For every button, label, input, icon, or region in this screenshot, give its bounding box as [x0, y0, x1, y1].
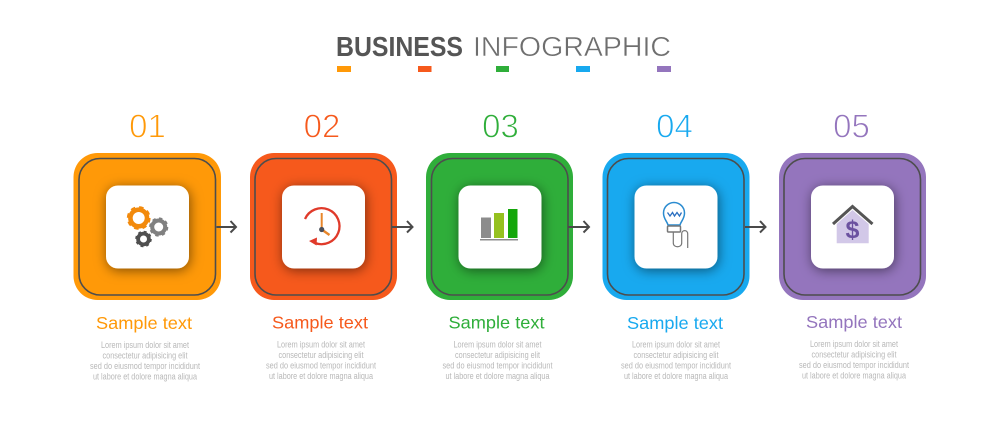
panel: step 5: [779, 108, 926, 382]
step 3 body text: sed do eiusmod tempor incididunt: [442, 360, 553, 372]
panel: step 3: [426, 108, 573, 382]
title: INFOGRAPHIC: [473, 31, 671, 62]
step 3 body text: consectetur adipisicing elit: [455, 350, 540, 361]
card 1 icon tile: [106, 186, 189, 268]
step 1 body text: consectetur adipisicing elit: [102, 350, 188, 362]
step 2 body text: sed do eiusmod tempor incididunt: [266, 360, 376, 372]
step 5 body text: consectetur adipisicing elit: [812, 350, 897, 360]
arrow 2 to 3: [392, 221, 412, 232]
number 05: 05: [833, 108, 870, 144]
step 3 body text: ut labore et dolore magna aliqua: [446, 371, 550, 382]
step 1 body text: Lorem ipsum dolor sit amet: [101, 340, 189, 351]
card 2 frame: [255, 158, 392, 295]
step 2 body text: ut labore et dolore magna aliqua: [269, 371, 373, 382]
card 1 frame: [79, 158, 216, 295]
step 5 body text: Lorem ipsum dolor sit amet: [810, 339, 898, 350]
card 5 frame: [784, 158, 920, 295]
card 3 icon tile: [458, 186, 542, 268]
number 01: 01: [129, 108, 166, 144]
step 4 heading: Sample text: [627, 313, 723, 333]
colour key bars: [337, 66, 671, 72]
card 3 frame: [432, 158, 568, 295]
number 03: 03: [482, 108, 519, 144]
card 3: [426, 153, 573, 300]
step 4 body text: sed do eiusmod tempor incididunt: [621, 360, 731, 372]
card 1: [74, 153, 221, 300]
step 4 body text: consectetur adipisicing elit: [634, 350, 719, 361]
panel: step 4: [602, 108, 750, 382]
card 4: [602, 153, 750, 300]
icon: house with dollar: [833, 206, 872, 244]
step 2 body text: consectetur adipisicing elit: [278, 350, 364, 361]
panel: step 2: [250, 108, 397, 382]
icon: gears: [128, 207, 167, 246]
card 5 icon tile: [811, 186, 894, 268]
panel: step 1: [74, 108, 221, 382]
step 5 body text: ut labore et dolore magna aliqua: [802, 370, 906, 382]
step 2 body text: Lorem ipsum dolor sit amet: [277, 340, 365, 350]
step 2 heading: Sample text: [272, 312, 368, 332]
step 4 body text: Lorem ipsum dolor sit amet: [632, 340, 720, 350]
arrow 3 to 4: [568, 221, 589, 232]
step 3 body text: Lorem ipsum dolor sit amet: [454, 340, 542, 350]
icon: bar chart: [480, 209, 518, 240]
card 4 icon tile: [634, 186, 718, 268]
step 2 body text: [266, 340, 376, 382]
arrow 4 to 5: [745, 221, 766, 232]
card 5: [779, 153, 926, 300]
icon: house with dollar: $: [846, 216, 860, 244]
number 02: 02: [304, 108, 340, 144]
step 4 body text: ut labore et dolore magna aliqua: [624, 371, 728, 382]
arrow 1 to 2: [216, 221, 236, 232]
step 3 heading: Sample text: [448, 312, 545, 332]
step 5 body text: sed do eiusmod tempor incididunt: [799, 360, 909, 371]
step 3 body text: [442, 340, 553, 382]
title: BUSINESS: [336, 31, 463, 62]
step 5 body text: [799, 339, 909, 382]
step 1 body text: [90, 340, 200, 382]
icon: light bulb: [664, 203, 688, 248]
step 1 body text: ut labore et dolore magna aliqua: [93, 372, 197, 382]
step 1 body text: sed do eiusmod tempor incididunt: [90, 361, 200, 372]
step 1 heading: Sample text: [96, 313, 192, 333]
step 5 heading: Sample text: [806, 312, 902, 332]
title: [336, 31, 671, 62]
step 4 body text: [621, 340, 731, 382]
icon: clock: [305, 208, 339, 246]
card 4 frame: [608, 158, 744, 295]
number 04: 04: [656, 108, 693, 144]
card 2: [250, 153, 397, 300]
card 2 icon tile: [282, 186, 365, 268]
